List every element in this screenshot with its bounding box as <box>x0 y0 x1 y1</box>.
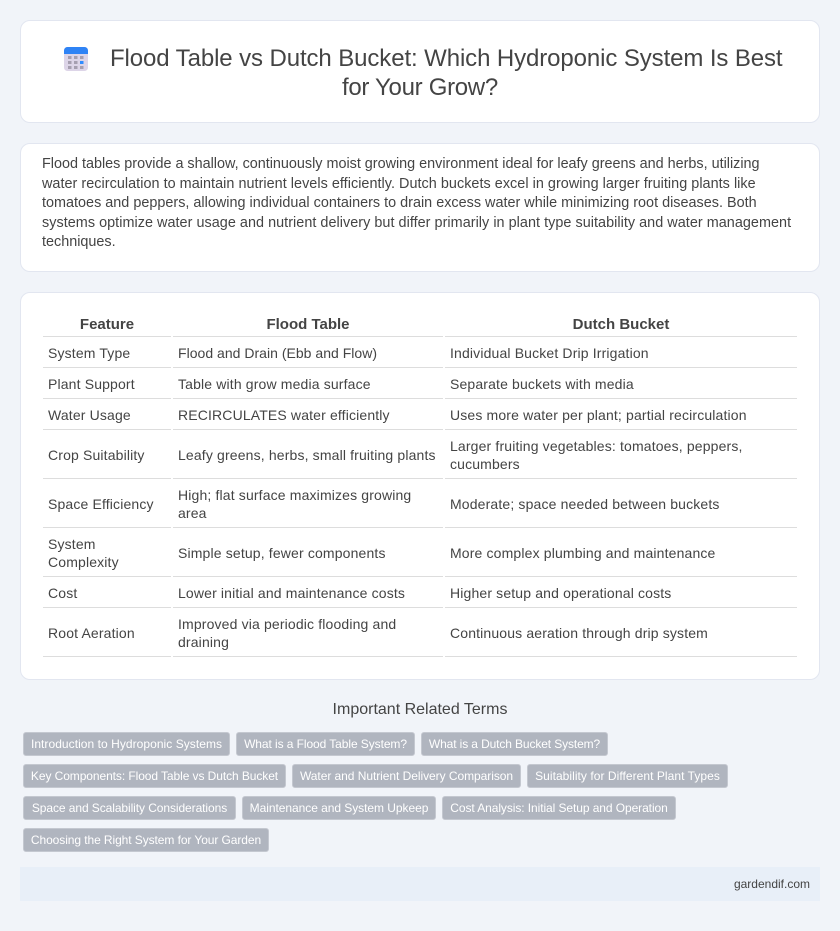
related terms tags: Maintenance and System Upkeep <box>250 801 428 815</box>
icon: calendar <box>64 47 88 71</box>
row: system complexity: System <box>48 536 96 552</box>
related terms tags: Introduction to Hydroponic Systems <box>31 737 222 751</box>
row: water usage <box>48 407 747 423</box>
title: Flood Table vs Dutch Bucket: Which Hydroponic System Is Best <box>110 45 783 72</box>
related terms tags <box>23 732 728 852</box>
related terms tags: Key Components: Flood Table vs Dutch Bucket <box>31 769 278 783</box>
panel: header <box>20 20 820 123</box>
row: water usage: Uses more water per plant; partial recirculation <box>450 407 747 423</box>
description text: systems optimize water usage and nutrient delivery but differ primarily in plant type suitability and water management <box>42 214 791 230</box>
row: plant support: Plant Support <box>48 376 135 392</box>
title <box>110 45 783 101</box>
related terms tags: What is a Flood Table System? <box>244 737 407 751</box>
related terms tags: Choosing the Right System for Your Garden <box>31 833 261 847</box>
row: water usage: RECIRCULATES water efficiently <box>178 407 390 423</box>
related terms tags: Space and Scalability Considerations <box>32 801 227 815</box>
row: system complexity: More complex plumbing and maintenance <box>450 545 715 561</box>
description text <box>42 156 792 250</box>
row: root aeration: Root Aeration <box>48 625 135 641</box>
table header <box>80 316 670 333</box>
row: cost: Lower initial and maintenance costs <box>178 585 405 601</box>
row: space efficiency: High; flat surface maximizes growing <box>178 487 411 503</box>
related terms tags: Water and Nutrient Delivery Comparison <box>300 769 513 783</box>
row: system type <box>48 345 649 361</box>
row: root aeration: draining <box>178 634 229 650</box>
row: system complexity <box>48 536 715 570</box>
row: crop suitability <box>48 438 743 472</box>
row: crop suitability: cucumbers <box>450 456 520 472</box>
row: crop suitability: Larger fruiting vegetables: tomatoes, peppers, <box>450 438 743 454</box>
panel: comparison table <box>20 292 820 680</box>
row: plant support: Table with grow media surface <box>178 376 371 392</box>
title: for Your Grow? <box>342 74 498 101</box>
related terms tags: What is a Dutch Bucket System? <box>429 737 600 751</box>
row: system type: Flood and Drain (Ebb and Flow) <box>178 345 377 361</box>
table header: Flood Table <box>266 316 350 333</box>
row: crop suitability: Crop Suitability <box>48 447 145 463</box>
row: water usage: Water Usage <box>48 407 131 423</box>
row: crop suitability: Leafy greens, herbs, small fruiting plants <box>178 447 436 463</box>
footer source: gardendif.com <box>734 877 810 891</box>
row: plant support: Separate buckets with media <box>450 376 634 392</box>
row: plant support <box>48 376 634 392</box>
row: root aeration: Improved via periodic flooding and <box>178 616 396 632</box>
description text: water recirculation to maintain nutrient levels efficiently. Dutch buckets excel in growing larger fruiting plants like <box>42 176 756 192</box>
row: system type: System Type <box>48 345 130 361</box>
row: cost <box>48 585 671 601</box>
row: root aeration: Continuous aeration through drip system <box>450 625 708 641</box>
row: space efficiency: area <box>178 505 207 521</box>
table header: Dutch Bucket <box>573 316 669 333</box>
row: space efficiency: Space Efficiency <box>48 496 154 512</box>
row: system complexity: Complexity <box>48 554 119 570</box>
row: cost: Cost <box>48 585 77 601</box>
related terms tags: Suitability for Different Plant Types <box>535 769 720 783</box>
related terms tags: Cost Analysis: Initial Setup and Operation <box>450 801 668 815</box>
row: space efficiency <box>48 487 720 521</box>
row: space efficiency: Moderate; space needed between buckets <box>450 496 720 512</box>
related terms heading: Important Related Terms <box>333 701 507 718</box>
table header: Feature <box>80 316 134 333</box>
footer <box>20 867 820 901</box>
panel: description <box>20 143 820 272</box>
description text: tomatoes and peppers, allowing individual containers to drain excess water while minimizing root diseases. Both <box>42 195 757 211</box>
row: system complexity: Simple setup, fewer components <box>178 545 386 561</box>
row: cost: Higher setup and operational costs <box>450 585 671 601</box>
description text: techniques. <box>42 234 116 250</box>
row: root aeration <box>48 616 708 650</box>
description text: Flood tables provide a shallow, continuously moist growing environment ideal for leafy greens and herbs, utilizing <box>42 156 760 172</box>
row: system type: Individual Bucket Drip Irrigation <box>450 345 649 361</box>
